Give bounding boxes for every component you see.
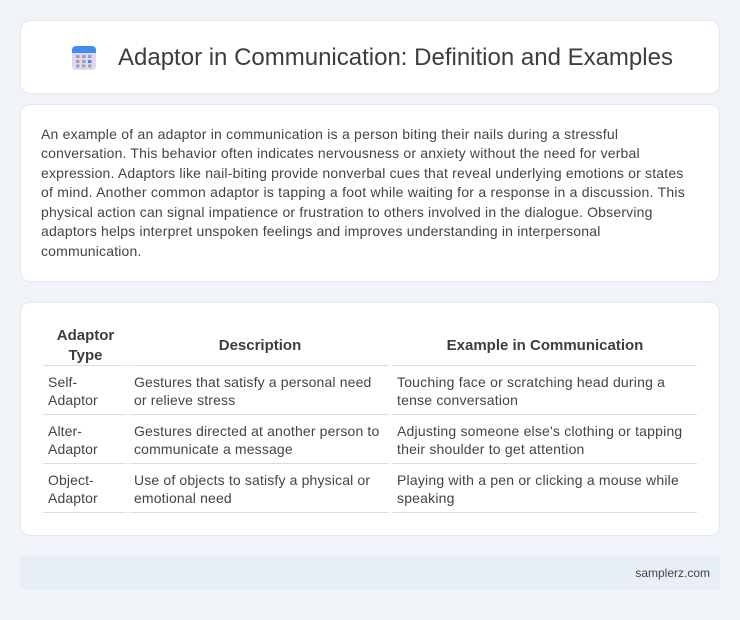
row: self-adaptor: Gestures that satisfy a personal need — [134, 374, 371, 390]
row: self-adaptor: or relieve stress — [134, 392, 235, 408]
row: alter-adaptor: Adjusting someone else's clothing or tapping — [397, 423, 682, 439]
icon: calendar — [72, 46, 96, 70]
row: object-adaptor: Object- — [48, 472, 94, 488]
row: self-adaptor: Adaptor — [48, 392, 98, 408]
row: alter-adaptor: Adaptor — [48, 441, 98, 457]
row: alter-adaptor — [48, 423, 682, 457]
table panel — [20, 302, 720, 536]
table header: Description — [219, 337, 301, 354]
intro paragraph: An example of an adaptor in communication is a person biting their nails during a stressful — [41, 126, 618, 142]
intro paragraph: expression. Adaptors like nail-biting provide nonverbal cues that reveal underlying emotions or states — [41, 165, 684, 181]
footer source text: samplerz.com — [635, 566, 710, 580]
row: object-adaptor — [48, 472, 679, 506]
intro text panel — [20, 104, 720, 282]
table header — [57, 327, 643, 364]
title: Adaptor in Communication: Definition and Examples — [118, 44, 673, 71]
row: object-adaptor: speaking — [397, 490, 455, 506]
row: alter-adaptor: Gestures directed at another person to — [134, 423, 379, 439]
row: alter-adaptor: their shoulder to get attention — [397, 441, 585, 457]
row: self-adaptor: Touching face or scratching head during a — [397, 374, 665, 390]
row: object-adaptor: Playing with a pen or clicking a mouse while — [397, 472, 679, 488]
row: self-adaptor — [48, 374, 665, 408]
footer bar — [20, 556, 720, 590]
row: object-adaptor: emotional need — [134, 490, 232, 506]
table header: Type — [69, 346, 102, 364]
adaptor table — [43, 327, 697, 513]
row: self-adaptor: tense conversation — [397, 392, 518, 408]
intro paragraph: conversation. This behavior often indicates nervousness or anxiety without the need for verbal — [41, 145, 640, 161]
row: alter-adaptor: communicate a message — [134, 441, 293, 457]
intro paragraph — [41, 126, 685, 259]
table header: Example in Communication — [447, 337, 643, 354]
row: self-adaptor: Self- — [48, 374, 77, 390]
table header: Adaptor — [57, 327, 114, 344]
row: alter-adaptor: Alter- — [48, 423, 82, 439]
intro paragraph: physical action can signal impatience or frustration to others involved in the dialogue. Observing — [41, 204, 653, 220]
header panel — [20, 20, 720, 94]
intro paragraph: adaptors helps interpret unspoken feelings and improves understanding in interpersonal — [41, 223, 600, 239]
intro paragraph: communication. — [41, 243, 142, 259]
intro paragraph: of mind. Another common adaptor is tapping a foot while waiting for a response in a discussion. This — [41, 184, 685, 200]
row: object-adaptor: Adaptor — [48, 490, 98, 506]
row: object-adaptor: Use of objects to satisfy a physical or — [134, 472, 370, 488]
